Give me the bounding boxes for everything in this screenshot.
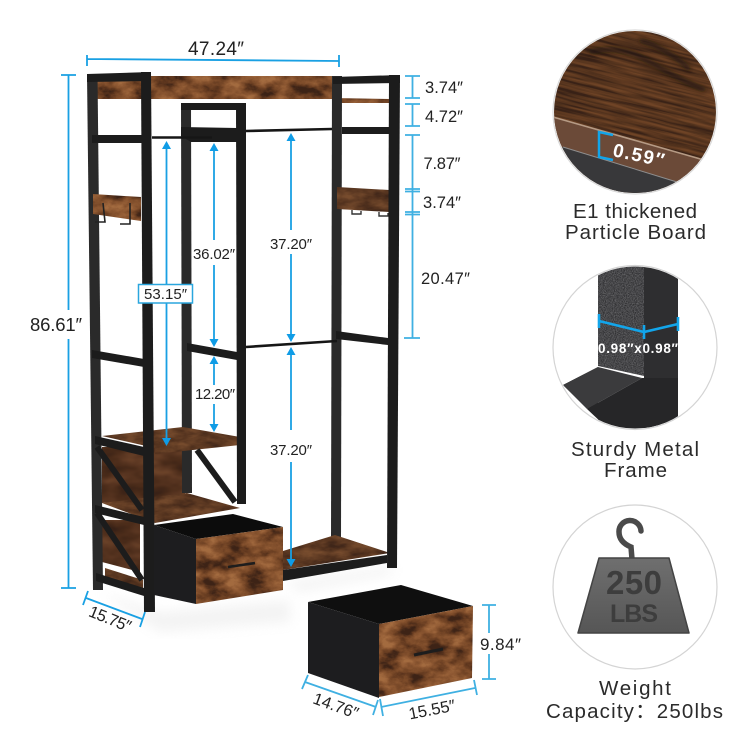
bottom shelf bbox=[283, 535, 390, 581]
top wood board bbox=[97, 76, 391, 103]
right back post bbox=[331, 76, 342, 540]
caption line 2: Frame bbox=[604, 459, 667, 482]
dimension: height 86.61 bbox=[30, 75, 82, 588]
dimension: 36.02 bbox=[193, 143, 236, 347]
dimension: 15.75 depth: 15.75″ bbox=[86, 603, 134, 636]
dimension: 12.20 bbox=[195, 356, 236, 432]
central frame top bbox=[181, 103, 246, 142]
dimension stack: right side: 4.72″ bbox=[425, 108, 463, 126]
lower shelf bbox=[102, 493, 240, 523]
panel: metal frame detail bbox=[553, 260, 717, 482]
caption: Sturdy Metal bbox=[571, 438, 699, 461]
dimension stack: right side: 20.47″ bbox=[421, 270, 470, 288]
central back post bbox=[181, 103, 192, 493]
dimension: 53.15: 53.15″ bbox=[144, 286, 188, 303]
circle wood board bbox=[554, 31, 716, 193]
hanging rods bbox=[152, 129, 337, 347]
dimension: 14.76: 14.76″ bbox=[311, 690, 361, 723]
dimension: width 47.24 bbox=[87, 39, 339, 67]
caption line 2: Capacity：250lbs bbox=[546, 700, 723, 723]
right upper bar bbox=[342, 127, 389, 134]
dimension: 9.84: 9.84″ bbox=[480, 635, 521, 654]
dimension: 53.15 bbox=[138, 141, 192, 446]
icon: weight bbox=[578, 558, 689, 633]
right front post bbox=[387, 75, 400, 568]
dimension: 37.20 upper bbox=[270, 133, 313, 342]
dimension stack: right side bbox=[404, 76, 470, 338]
dimension: 9.84 bbox=[480, 605, 521, 679]
thickness label: 0.59″ bbox=[611, 140, 666, 172]
drawer separate bbox=[308, 585, 473, 698]
panel: particle board detail bbox=[552, 29, 718, 239]
dimension: 15.55: 15.55″ bbox=[407, 697, 457, 723]
dimension: 36.02: 36.02″ bbox=[193, 246, 236, 263]
size label: 0.98″x0.98″ bbox=[598, 341, 679, 356]
panel: weight capacity bbox=[546, 505, 723, 723]
dimension: 37.20 lower: 37.20″ bbox=[270, 442, 313, 459]
width marker bbox=[599, 314, 678, 339]
caption line 2: Particle Board bbox=[565, 221, 706, 244]
left rail bars bbox=[92, 135, 144, 596]
dimension stack: right side: 3.74″ bbox=[425, 79, 463, 97]
thickness marker bbox=[599, 132, 613, 160]
dimension: 14.76 bbox=[302, 675, 378, 723]
right mid bar bbox=[336, 331, 388, 345]
icon: hook bbox=[619, 520, 641, 559]
right hook shelf with hooks bbox=[337, 187, 389, 216]
weight number: 250 bbox=[606, 564, 662, 601]
drawer installed bbox=[154, 514, 283, 604]
dimension: 15.55 bbox=[380, 680, 477, 723]
left hook shelf with hooks bbox=[93, 194, 141, 224]
post close-up bbox=[563, 260, 678, 440]
weight unit: LBS bbox=[610, 600, 658, 628]
floor shadow bbox=[100, 566, 392, 632]
dimension stack: right side: 3.74″ bbox=[423, 194, 461, 212]
dimension: 37.20 lower bbox=[270, 347, 313, 567]
dimension: 37.20 upper: 37.20″ bbox=[270, 236, 313, 253]
dimension: 15.75 depth bbox=[83, 591, 145, 636]
dimension: height 86.61: 86.61″ bbox=[30, 314, 82, 335]
diagonal braces bbox=[97, 447, 235, 580]
dimension: width 47.24: 47.24″ bbox=[188, 39, 244, 60]
product: wardrobe frame with shelves bbox=[87, 72, 400, 612]
right top bar bbox=[333, 75, 400, 84]
mid bar centre bbox=[187, 343, 237, 360]
front left post bbox=[141, 72, 155, 612]
upper shelf bbox=[102, 427, 240, 454]
caption: E1 thickened bbox=[573, 200, 697, 223]
dimension stack: right side: 7.87″ bbox=[424, 155, 461, 173]
top left bar bbox=[87, 72, 151, 82]
wood back panels of cubbies bbox=[102, 447, 185, 590]
caption: Weight bbox=[599, 677, 671, 700]
dimension: 12.20: 12.20″ bbox=[195, 386, 236, 403]
back left post bbox=[87, 74, 103, 590]
central front post bbox=[236, 103, 246, 504]
